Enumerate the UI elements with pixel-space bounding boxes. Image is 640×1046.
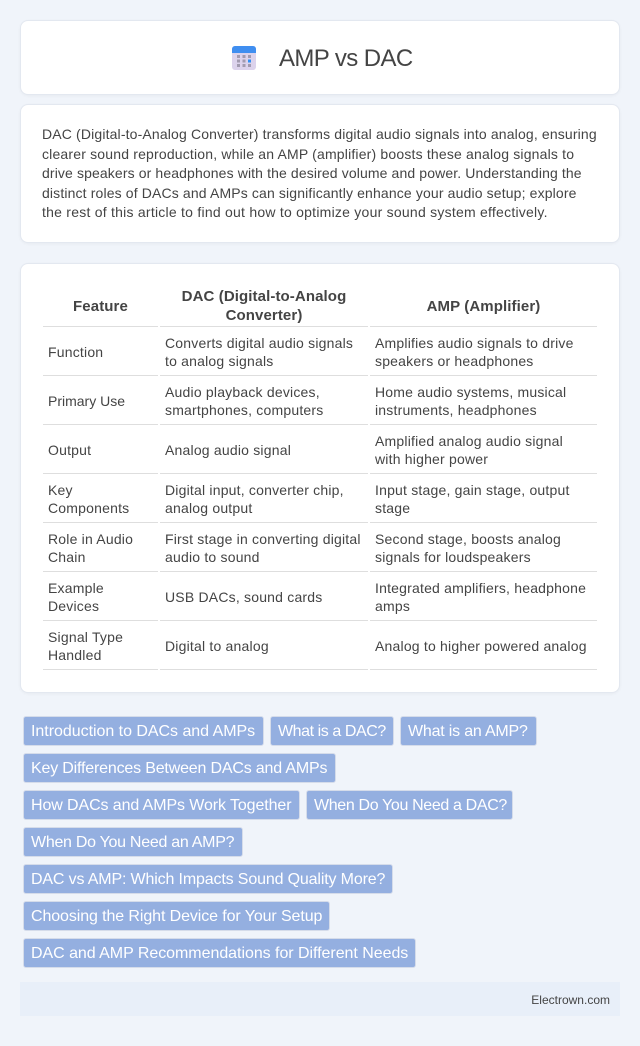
row: key components: analog output [165,500,252,516]
tag: What is a DAC? [278,723,386,740]
title: AMP vs DAC [279,45,413,72]
row: key components: Digital input, converter chip, [165,482,344,498]
row: primary use: Audio playback devices, [165,384,320,400]
row: function: to analog signals [165,352,273,368]
table header: DAC [160,287,368,327]
tag: Key Differences Between DACs and AMPs [31,760,327,777]
footer [20,982,620,1016]
tag: DAC and AMP Recommendations for Different Needs [31,945,408,962]
row: primary use: smartphones, computers [165,402,323,418]
row: output: Analog audio signal [165,442,291,458]
footer source text: Electrown.com [531,993,610,1007]
intro paragraph: clearer sound reproduction, while an AMP (amplifier) boosts these analog signals to [42,146,574,162]
row: signal type handled [43,628,597,670]
row: example devices [43,580,597,621]
row: example devices: Devices [48,598,99,614]
tag: DAC vs AMP: Which Impacts Sound Quality More? [31,871,385,888]
tag: How DACs and AMPs Work Together [31,797,291,814]
row: key components [43,482,597,523]
intro paragraph [42,126,597,220]
tag [23,790,300,820]
row: function: Converts digital audio signals [165,334,353,350]
panel: comparison table [20,263,620,693]
tag: When Do You Need an AMP? [31,834,234,851]
row: role in audio chain: Second stage, boosts analog [375,530,561,546]
row: example devices: Example [48,580,104,596]
row: role in audio chain: Role in Audio [48,530,133,546]
tag [23,901,330,931]
row: key components: Key [48,482,73,498]
row: primary use: Home audio systems, musical [375,384,566,400]
row: output [43,432,597,474]
intro paragraph: drive speakers or headphones with the desired volume and power. Understanding the [42,165,582,181]
row: signal type handled: Analog to higher powered analog [375,638,587,654]
row: function: Amplifies audio signals to drive [375,334,574,350]
tag: Choosing the Right Device for Your Setup [31,908,322,925]
row: output: with higher power [375,450,488,466]
tag [23,827,243,857]
row: key components: Components [48,500,129,516]
row: role in audio chain: signals for loudspeakers [375,548,531,564]
table header: feature [43,287,158,327]
intro paragraph: the rest of this article to find out how to optimize your sound system effectively. [42,204,548,220]
tag [400,716,537,746]
intro paragraph: DAC (Digital-to-Analog Converter) transforms digital audio signals into analog, ensuring [42,126,597,142]
row: primary use [43,384,597,425]
row: output: Output [48,442,91,458]
row: example devices: Integrated amplifiers, headphone [375,580,586,596]
tag: Introduction to DACs and AMPs [31,723,255,740]
row: primary use: Primary Use [48,392,125,408]
row: example devices: amps [375,598,410,614]
title card [20,20,620,95]
row: role in audio chain: Chain [48,548,86,564]
tag: What is an AMP? [408,723,528,740]
row: output: Amplified analog audio signal [375,432,563,448]
intro paragraph: distinct roles of DACs and AMPs can significantly enhance your audio setup; explore [42,184,577,200]
tag [306,790,513,820]
tag: When Do You Need a DAC? [314,797,507,814]
table header: feature: Feature [73,298,128,315]
row: example devices: USB DACs, sound cards [165,588,322,604]
row: primary use: instruments, headphones [375,402,537,418]
tag [23,938,416,968]
icon: calendar [232,46,256,70]
intro text panel [20,104,620,243]
row: key components: stage [375,500,410,516]
tag [23,864,393,894]
tag [270,716,394,746]
row: function: Function [48,344,103,360]
table header: AMP [370,287,597,327]
tag [23,716,264,746]
row: signal type handled: Signal Type [48,628,123,644]
row: role in audio chain: audio to sound [165,548,260,564]
row: signal type handled: Digital to analog [165,638,269,654]
table header: AMP: AMP (Amplifier) [427,298,540,315]
tag [23,753,336,783]
row: function [43,334,597,376]
row: signal type handled: Handled [48,646,102,662]
topic tags [23,716,537,968]
row: key components: Input stage, gain stage, output [375,482,570,498]
row: function: speakers or headphones [375,352,534,368]
row: role in audio chain: First stage in converting digital [165,530,361,546]
table header: DAC: Converter) [226,306,302,324]
row: role in audio chain [43,530,597,572]
table header: DAC: DAC (Digital-to-Analog [182,288,346,305]
